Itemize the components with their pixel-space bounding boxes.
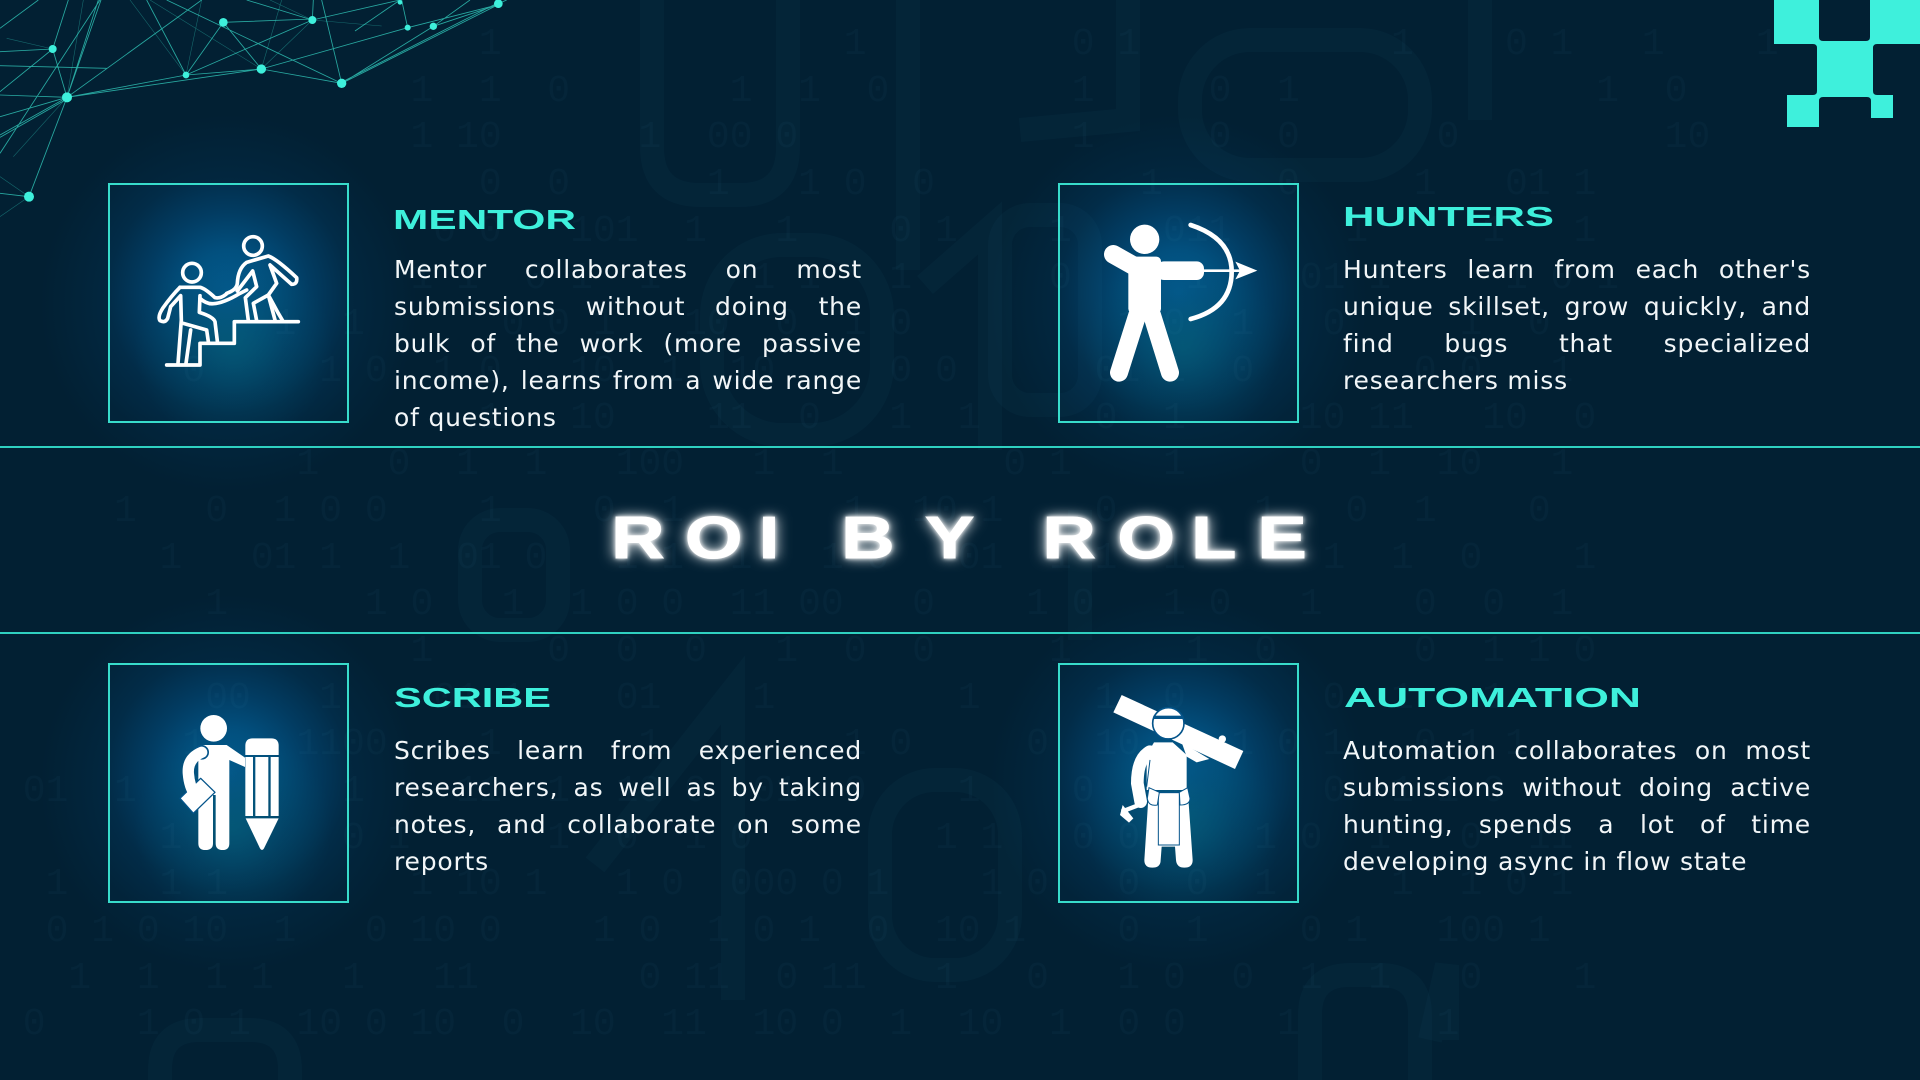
title: BY (841, 506, 974, 571)
background binary digits: 1 0 1 1 0 1 0 1 1 0 0 1 0 1 0 11 (0, 817, 1573, 860)
text: automation description: submissions without doing active (1343, 773, 1811, 802)
divider lines (0, 446, 1920, 448)
background binary digits: 1 1 0 1 1 0 0 11 00 0 1 0 1 0 1 0 0 1 (0, 583, 1573, 626)
heading: mentor: MENTOR (393, 204, 576, 235)
background binary digits: 1 1 0 1 1 1 1 1 0 1 01 1 1 0 1 (0, 257, 1619, 300)
background binary digits: 1 0 0 0 1 0 0 1 1 0 0 1 1 0 (0, 630, 1596, 673)
heading: hunters: HUNTERS (1343, 201, 1554, 232)
text: scribe description: Scribes learn from experienced (394, 736, 862, 765)
text: hunters description: unique skillset, grow quickly, and (1343, 292, 1811, 321)
background binary digits: 0 0 1 1 0 0 1 0 1 01 1 (0, 163, 1596, 206)
background binary digits: 0 1 0 1 10 0 10 0 10 11 10 0 1 10 1 0 0 1 1 (0, 1003, 1459, 1046)
background binary digits: 1 0 1 1 100 1 1 0 1 1 0 1 10 1 (0, 443, 1573, 486)
text: mentor description: of questions (394, 403, 557, 432)
icon tile: archer (1058, 183, 1299, 423)
text: mentor description (394, 255, 862, 432)
text: mentor description: submissions without doing the (394, 292, 862, 321)
text: scribe description (394, 736, 862, 876)
icon tile: mentor helping climber (108, 183, 349, 423)
text: hunters description: find bugs that specialized (1343, 329, 1811, 358)
background binary digits: 1 1 0 1 1 0 1 0 1 1 0 (0, 70, 1687, 113)
background binary digits: 1 1 0 0 1 10 0 1 0 1 0 1 0 1 0 (0, 303, 1551, 346)
text: hunters description (1343, 255, 1811, 395)
network constellation decoration (0, 0, 507, 217)
background binary digits: 1 1 1 1 1 11 0 11 0 11 1 0 1 0 0 1 1 0 1 (0, 957, 1596, 1000)
panel: automation (1058, 663, 1811, 903)
heading: automation: AUTOMATION (1344, 682, 1641, 713)
heading: scribe: SCRIBE (394, 682, 551, 713)
background binary digits: 1 0 1 0 0 1 0 1 1 10 1 0 1 0 1 0 (0, 490, 1551, 533)
background binary digits: 1 1 1 1 10 1 1 0 000 0 1 1 0 0 0 1 1 1 0 1 (0, 863, 1573, 906)
title: ROI (611, 506, 779, 571)
icon tile: person with pencil (108, 663, 349, 903)
background binary digits: 00 1 01 1 01 1 1 1 0 0 1 1 (0, 677, 1505, 720)
text: scribe description: reports (394, 847, 489, 876)
text: mentor description: Mentor collaborates on most (394, 255, 862, 284)
text: automation description: hunting, spends a lot of time (1343, 810, 1811, 839)
panel: hunters (1058, 183, 1811, 423)
text: mentor description: income), learns from a wide range (394, 366, 862, 395)
text: scribe description: researchers, as well as by taking (394, 773, 862, 802)
text: mentor description: bulk of the work (more passive (394, 329, 862, 358)
title: ROLE (1042, 506, 1307, 571)
panel: mentor (108, 183, 862, 432)
background binary digits: 1 10 11 0 1 1 0 1 10 11 10 0 (0, 397, 1596, 440)
background binary digits: 1 01 1 1 01 0 1 1 1 1 0 01 1 1 1 1 1 0 1 (0, 537, 1596, 580)
background binary digits: 1 1 0 1 1 0 1 1 1 (0, 23, 1779, 66)
background binary digits: 0 1 0 10 1 0 10 0 1 0 1 0 1 0 10 1 0 1 0 1 100 1 (0, 910, 1551, 953)
text: scribe description: notes, and collaborate on some (394, 810, 862, 839)
background binary digits: 1 1100 1 1 1 0 0 10 1 0 1 0 1 1 (0, 723, 1528, 766)
text: hunters description: Hunters learn from each other's (1343, 255, 1811, 284)
background binary digits: 0 1 0 1 0 10 1 10 0 0 01 1 0 0 0 1 (0, 350, 1573, 393)
text: hunters description: researchers miss (1343, 366, 1568, 395)
title (602, 506, 1315, 571)
panel: scribe (108, 663, 862, 903)
corner pixel logo mark (1774, 0, 1920, 127)
text: automation description: developing async in flow state (1343, 847, 1747, 876)
text: automation description (1343, 736, 1811, 876)
background binary digits: 1 10 1 00 0 1 0 0 0 10 (0, 116, 1710, 159)
background binary digits: 01 1 0 1 11 1 10 0 01 0 1 0 1 0 1 1 0 (0, 770, 1505, 813)
background binary digits: 0 0 101 1 1 0 1 1 011 1 1 1 (0, 210, 1596, 253)
icon tile: worker carrying plank (1058, 663, 1299, 903)
text: automation description: Automation collaborates on most (1343, 736, 1811, 765)
